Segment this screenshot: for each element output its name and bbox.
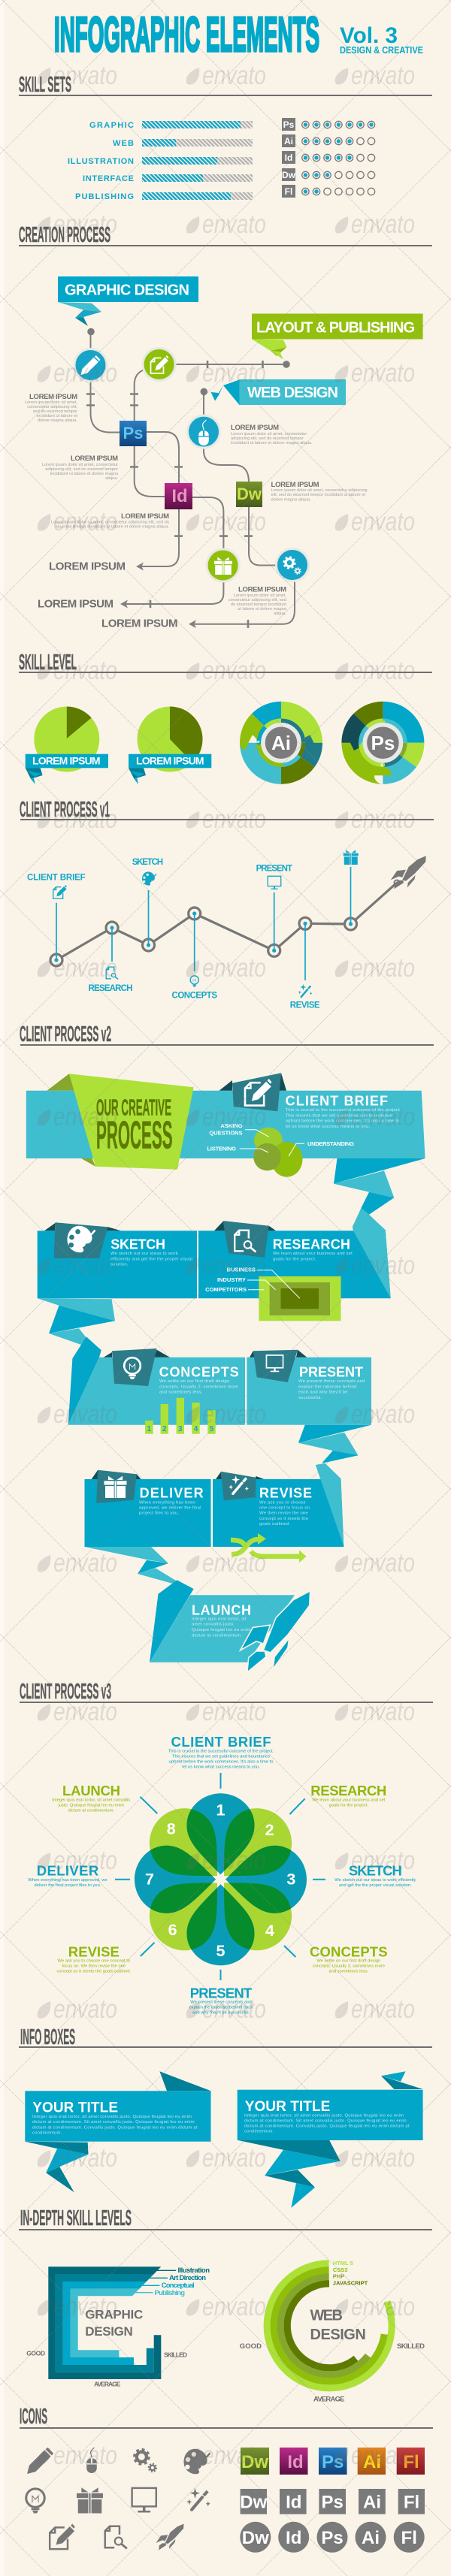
step: launch: Integer quis erat tortor, sit [192,1617,247,1622]
step: sketch: efficiently and get the the proper visual [110,1257,192,1261]
heading: creation process: CREATION PROCESS [19,223,110,247]
ribbon fold 3 [38,1298,115,1425]
text block: lorem 2: Lorem ipsum dolor sit amet, consectetur [42,463,118,467]
text block: deliver: DELIVER [37,1863,98,1879]
text block: present: We present these concepts and [190,2001,252,2005]
text block: lorem 3: eiusmod tempor incididunt ut labore et dolore magna aliqua. [56,524,169,529]
step: research: RESEARCH [89,984,132,993]
icon: Dw logo: Dw [237,485,262,503]
ribbon fold 2 [353,1208,391,1298]
text block: lorem 6: aliqua. [274,612,286,616]
chart: concept bars: 5 [210,1425,214,1433]
text block: lorem 6: LOREM IPSUM [238,586,286,593]
step: launch: LAUNCH [192,1602,251,1617]
step: client brief: upfront before the work commences. It's also a time to [286,1119,400,1124]
chart: flower diagram: 1 [216,1801,226,1820]
icon: Id logo [165,483,192,509]
chart: pie 2 [129,706,211,784]
panel: creative process ribbon [26,1073,425,1672]
chart: nested research boxes [205,1267,341,1321]
panel: software skill dots: Ai [284,136,293,146]
chart: web design rings: GOOD [240,2342,262,2351]
step: deliver: When everything has been [139,1500,195,1505]
text block: lorem 2: adipiscing elit, sed do eiusmod tempor [45,467,118,472]
step: present: successful. [298,1396,322,1400]
step: sketch: SKETCH [132,858,163,867]
arrowheads [120,562,196,628]
panel: grey round logos: Dw [242,2528,269,2548]
text block: lorem 6: Lorem ipsum dolor sit amet, [234,593,286,598]
title badge: our creative process [47,1074,194,1170]
chart: Ps donut [350,710,416,775]
chart: flower diagram: 2 [265,1821,274,1839]
text block: lorem 4: Lorem ipsum dolor sit amet, consectetur [231,432,307,436]
text block: lorem 4: incididunt ut labore et dolore magna aliqua. [231,441,313,445]
step: sketch: solution. [110,1263,129,1267]
chart: graphic design nested levels: Illustration [177,2266,210,2275]
icon: Ps logo [120,421,147,446]
title badge: our creative process: PROCESS [96,1113,173,1157]
outcome labels: LOREM IPSUM [38,598,114,611]
panel: grey round logos: Id [286,2528,301,2548]
panel: grey square logos [240,2489,425,2514]
panel: grey round logos: Ai [362,2528,380,2548]
text block: lorem 5 [271,481,368,502]
banner: layout and publishing: LAYOUT & PUBLISHING [256,320,415,337]
text block: present: PRESENT [190,1985,253,2001]
chart: nested research boxes: COMPETITORS [205,1286,247,1293]
chart: graphic design nested levels: Conceptual [162,2282,195,2290]
text block: lorem 1 [25,393,77,423]
text block: lorem 1: dolore magna aliqua. [38,418,77,423]
panel: info box 1: YOUR TITLE [32,2100,118,2116]
panel: info box 2: dictum at condimentum. Sit amet convallis justo. Quisque feugiat leo eu enim [244,2118,407,2123]
text block: lorem 4: LOREM IPSUM [231,424,279,432]
chart: flower diagram: 7 [145,1871,154,1889]
step: revise: REVISE [290,1001,320,1010]
text block: research: RESEARCH [310,1783,386,1798]
step: deliver gift [344,850,359,865]
text block: lorem 2 [42,454,119,481]
step: launch: dictum at condimentum. [192,1633,242,1638]
banner: graphic design [58,276,198,326]
icon: Ps logo: Ps [123,424,143,442]
text block: lorem 2: LOREM IPSUM [71,454,118,463]
heading: in-depth skill levels: IN-DEPTH SKILL LEVELS [20,2206,132,2230]
text block: lorem 5: elit, sed do eiusmod tempor incididunt ut labore et [271,493,365,497]
chart: graphic design nested levels: AVERAGE [94,2381,121,2388]
icon: note circle [143,349,175,380]
step: deliver: DELIVER [140,1485,204,1500]
step: deliver: project files to you. [139,1511,179,1516]
ribbon: sketch band [38,1231,197,1298]
text block: lorem 5: dolore magna aliqua. [271,497,311,502]
text block: client brief: let us know what success means to you. [182,1765,260,1770]
icon: Dw logo [236,482,262,507]
title: Vol. 3 [340,23,398,48]
chart: web design rings: SKILLED [397,2342,425,2351]
step: present: PRESENT [256,864,292,873]
panel: skill bars: INTERFACE [83,174,134,183]
step: revise [216,1472,312,1527]
panel: info box 1: dictum at condimentum. Sit amet convallis justo. Quisque feugiat leo eu enim [32,2120,195,2125]
banner: web design: WEB DESIGN [247,385,338,401]
text block: revise: We ask you to choose one concept to [58,1959,130,1964]
step: sketch [132,858,163,886]
chart: venn diagram [207,1122,354,1177]
end dots [87,328,290,395]
label: Ai: Ai [271,732,291,754]
chart: flower diagram: 3 [286,1871,295,1889]
panel: grey square logos: Fl [404,2493,419,2512]
text block: deliver [28,1863,107,1888]
text block: launch: dictum at condimentum. [68,1808,114,1813]
step: deliver: approved, we deliver the final [139,1505,201,1510]
panel: software skill dots: Fl [285,186,292,197]
ribbon: concepts band [68,1357,245,1425]
panel: coloured software logos [241,2448,425,2475]
heading: skill sets: SKILL SETS [19,73,71,97]
panel: skill bars: ILLUSTRATION [68,157,134,166]
chart: concept bars: 4 [194,1425,198,1433]
text block: lorem 2: aliqua. [105,476,118,481]
panel: skill bars: PUBLISHING [75,192,134,201]
step: research [214,1221,353,1261]
text block: lorem 3: Lorem ipsum dolor sit amet, consectetur adipiscing elit, sed do [51,520,169,524]
text block: client brief: This is crucial to the successful outcome of the project. [168,1749,274,1753]
text block: lorem 6 [229,586,287,616]
chart: venn diagram: ASKING [220,1122,243,1129]
outcome labels: LOREM IPSUM [101,618,177,630]
step: client brief [219,1073,401,1129]
text block: revise: REVISE [68,1943,120,1959]
panel: grey round logos: Fl [401,2528,417,2548]
step: client brief: CLIENT BRIEF [286,1094,388,1109]
text block: sketch [334,1863,416,1888]
text block: sketch: and get the the proper visual solution. [339,1883,412,1888]
panel: coloured software logos: Ps [322,2452,344,2472]
text block: deliver: When everything has been approved, we [28,1878,107,1883]
chart: venn diagram: UNDERSTANDING [307,1140,354,1147]
chart: web design rings: JAVASCRIPT [333,2280,368,2287]
text block: launch: LAUNCH [62,1783,120,1798]
icon: grey rocket [391,856,426,889]
chart: web design rings: HTML 5 [333,2260,353,2266]
chart: process line [50,856,426,980]
text block: research [310,1783,386,1807]
step: concepts: CONCEPTS [159,1365,239,1380]
step: present [256,864,292,889]
step: research: RESEARCH [273,1237,350,1252]
text block: concepts: CONCEPTS [310,1943,388,1959]
step: revise [290,984,320,1010]
chart: graphic design nested levels: SKILLED [164,2351,187,2359]
text block: concepts: and sometimes less. [328,1970,369,1974]
text block: lorem 2: incididunt ut labore et dolore magna [50,472,119,476]
icon: gears circle [277,548,308,581]
chart: venn diagram: QUESTIONS [209,1130,243,1137]
banner: layout and publishing [252,314,423,360]
step: revise: We ask you to choose [259,1500,306,1505]
chart: nested research boxes: INDUSTRY [217,1276,246,1283]
chart: graphic design nested levels: Publishing [155,2289,185,2297]
panel: info box 2: Integer quis erat tortor, sit amet convallis justo. Quisque feugiat leo eu enim [244,2113,404,2118]
text block: launch: justo. Quisque feugiat leo eu enim [57,1803,124,1807]
chart: web design rings: CSS3 [333,2266,347,2273]
panel: grey icon set [26,2448,210,2550]
chart: graphic design nested levels [26,2266,210,2388]
title: DESIGN & CREATIVE [340,45,423,56]
text block: lorem 4 [231,424,313,445]
chart: flower diagram: 6 [168,1921,177,1939]
chart: venn diagram: LISTENING [207,1146,236,1152]
step: client brief: This is crucial to the successful outcome of the project. [286,1108,401,1113]
panel: skill bars [68,121,253,201]
chart: Ai donut [248,710,313,775]
step: concepts [104,1348,239,1395]
ribbon: deliver band [84,1479,210,1547]
step: present: We present these concepts and [298,1379,365,1384]
panel: info box 2: YOUR TITLE [245,2099,330,2115]
step: sketch [44,1222,192,1267]
step: sketch: SKETCH [110,1237,165,1252]
chart: pie 1: LOREM IPSUM [32,755,101,767]
panel: info box 1: condimentum. [32,2131,62,2135]
text block: lorem 5: Lorem ipsum dolor sit amet, consectetur adipiscing [271,488,368,493]
ribbon fold 1 [334,1158,425,1215]
panel: grey square logos: Id [286,2493,301,2512]
text block: lorem 5: LOREM IPSUM [271,481,319,489]
panel: software skill dots: Ps [283,119,295,130]
text block: lorem 3: LOREM IPSUM [121,512,169,521]
chart: concept bars [145,1398,216,1434]
panel: coloured software logos: Fl [403,2452,419,2472]
chart: pie 1 [26,706,108,784]
text block: client brief [168,1734,274,1770]
step: client brief: This insures that we set guidelines and boundaries [286,1113,392,1118]
text block: launch [52,1783,130,1813]
text block: revise [56,1943,131,1974]
panel: info box 1: dictum at condimentum. Convallis justo. Quisque feugiat leo eu enim dictum at [32,2125,198,2130]
panel: coloured software logos: Ai [363,2452,381,2472]
icon: launch rocket [241,1591,310,1672]
panel: grey square logos: Dw [240,2493,268,2512]
step: revise: REVISE [259,1485,312,1500]
panel: info box 2: condimentum. [244,2130,274,2134]
text block: deliver: deliver the final project files to you. [35,1883,101,1888]
panel: info box 1: Integer quis erat tortor, sit amet convallis justo. Quisque feugiat leo eu enim [32,2115,192,2119]
panel: creation process flow [25,276,423,630]
text block: sketch: We sketch out our ideas to work efficiently [334,1878,416,1883]
text block: present: explain the rationale behind each [189,2006,253,2010]
chart: nested research boxes: BUSINESS [227,1267,256,1273]
text block: launch: Integer quis erat tortor, sit amet convallis [52,1798,130,1802]
heading: client process v3: CLIENT PROCESS v3 [20,1680,111,1704]
text block: research: We learn about your business and set [312,1798,386,1802]
banner: graphic design: GRAPHIC DESIGN [65,282,189,299]
heading: client process v2: CLIENT PROCESS v2 [20,1022,111,1046]
step: present: explain the rationale behind [298,1385,357,1389]
chart: graphic design nested levels: Art Direction [169,2274,206,2282]
heading: client process v1: CLIENT PROCESS v1 [20,798,110,822]
panel: info box 1 [25,2071,210,2192]
text block: sketch: SKETCH [349,1863,402,1879]
chart: flower diagram: 8 [167,1820,176,1838]
chart: pie 2: LOREM IPSUM [136,755,204,767]
panel: grey round logos [240,2522,425,2553]
text block: lorem 6: do eiusmod tempor incididunt [231,602,286,607]
panel: software skill dots [282,118,375,198]
step: client brief: let us know what success means to you. [286,1125,370,1129]
ribbon fold 6 [84,1547,194,1662]
chart: graphic design nested levels: GOOD [26,2350,45,2357]
step: revise: goals outlined. [259,1522,290,1527]
panel: info box 2 [238,2071,423,2208]
chart: web design rings: PHP [333,2273,344,2280]
step: research [89,967,132,993]
panel: grey square logos: Ps [322,2493,344,2512]
ribbon: research band [198,1231,391,1298]
heading: info boxes: INFO BOXES [20,2025,75,2049]
ribbon fold 4 [298,1425,371,1463]
chart: flower diagram: 4 [265,1922,274,1940]
step: revise: concept so it meets the [259,1517,309,1521]
step: sketch: We sketch out our ideas to work [110,1252,178,1256]
text block: lorem 3 [51,512,169,529]
panel: software skill dots: Dw [282,170,296,180]
text block: lorem 1: LOREM IPSUM [29,393,77,401]
chart: concept bars: 3 [178,1425,183,1433]
text block: revise: focus on. We then revise the one [62,1964,126,1969]
text block: lorem 6: ut labore et dolore magna [238,607,287,612]
ribbon: revise band [213,1479,344,1547]
step: client brief: CLIENT BRIEF [27,874,86,883]
ribbon: client brief band [26,1091,425,1158]
banner: web design [210,379,346,405]
step: research: goals for the project. [273,1257,316,1261]
panel: skill bars: WEB [113,139,134,148]
chart: web design rings: WEB [310,2307,343,2324]
icon: gift circle [207,549,239,581]
step: concepts: We settle on our first draft design [159,1379,229,1384]
text block: lorem 1: incididunt ut labore et [37,414,77,418]
step: present: PRESENT [299,1365,363,1380]
panel: info box 2: dictum at condimentum. Convallis justo. Quisque feugiat leo eu enim dictum at [244,2124,410,2128]
chart: concept bars: 2 [162,1425,167,1433]
chart: web design rings: DESIGN [310,2327,366,2343]
step: deliver [92,1470,204,1516]
chart: concept bars: 1 [147,1425,152,1433]
step: concepts: and sometimes less. [159,1391,203,1395]
text block: concepts [310,1943,388,1974]
text block: lorem 1: consectetur adipiscing elit, [27,405,77,409]
text block: present [189,1985,253,2016]
title badge: our creative process: OUR CREATIVE [96,1094,171,1120]
panel: skill bars: GRAPHIC [89,121,134,130]
icon: Id logo: Id [171,486,188,506]
step: present [250,1350,365,1400]
panel: grey square logos: Ai [363,2493,381,2512]
step: launch: amet convallis justo. [192,1623,235,1627]
panel: software skill dots: Id [285,153,292,163]
step: client brief [27,874,86,898]
text block: client brief: This insures that we set guidelines and boundaries [172,1755,270,1759]
label: Ps: Ps [371,732,395,754]
text block: present: and why they'll be successful. [192,2011,250,2016]
text block: concepts: concepts. Usually 3, sometimes more [313,1964,385,1969]
text block: lorem 1: sed do eiusmod tempor [33,409,77,414]
ribbon: launch band [150,1595,295,1662]
ribbon: present band [247,1357,371,1425]
text block: client brief: upfront before the work commences. It's also a time to [168,1760,274,1765]
chart: graphic design nested levels: GRAPHIC [85,2308,143,2322]
chart: flower diagram: 5 [216,1942,226,1960]
step: launch: Quisque feugiat leo eu enim [192,1628,251,1632]
step: concepts: CONCEPTS [171,992,217,1001]
text block: lorem 1: Lorem ipsum dolor sit amet, [25,400,77,405]
text block: revise: concept so it meets the goals outlined. [56,1970,131,1974]
chart: web design rings [240,2260,425,2404]
heading: skill level: SKILL LEVEL [19,651,77,675]
panel: grey round logos: Ps [321,2528,344,2548]
chart: flower diagram [115,1773,325,1980]
chart: graphic design nested levels: DESIGN [85,2324,133,2339]
outcome labels [38,560,177,630]
step: launch [192,1602,251,1638]
step: revise: We then revise the one [259,1511,308,1516]
panel: coloured software logos: Id [287,2452,304,2472]
text block: lorem 6: consectetur adipiscing elit, sed [229,598,286,602]
chart: web design rings: AVERAGE [313,2396,344,2404]
text block: concepts: We settle on our first draft design [316,1959,380,1964]
step: concepts: concepts. Usually 3, sometimes more [159,1385,238,1389]
step: revise: one concept to focus on. [259,1505,311,1510]
panel: coloured software logos: Dw [241,2452,268,2472]
heading: icons: ICONS [20,2405,47,2429]
step: research: We learn about your business and set [273,1252,353,1256]
step: present: each and why they'll be [298,1391,348,1395]
text block: lorem 4: adipiscing elit, sed do eiusmod tempor [231,436,304,441]
icon: pencil circle [74,349,107,382]
text block: research: goals for the project. [329,1803,368,1807]
outcome labels: LOREM IPSUM [49,560,126,573]
text block: client brief: CLIENT BRIEF [171,1734,271,1750]
connector lines [86,331,295,628]
arrows: revise crossing [231,1533,307,1563]
step: concepts [171,976,217,1001]
ribbon fold 5 [316,1463,344,1546]
icon: mouse circle [188,415,219,448]
